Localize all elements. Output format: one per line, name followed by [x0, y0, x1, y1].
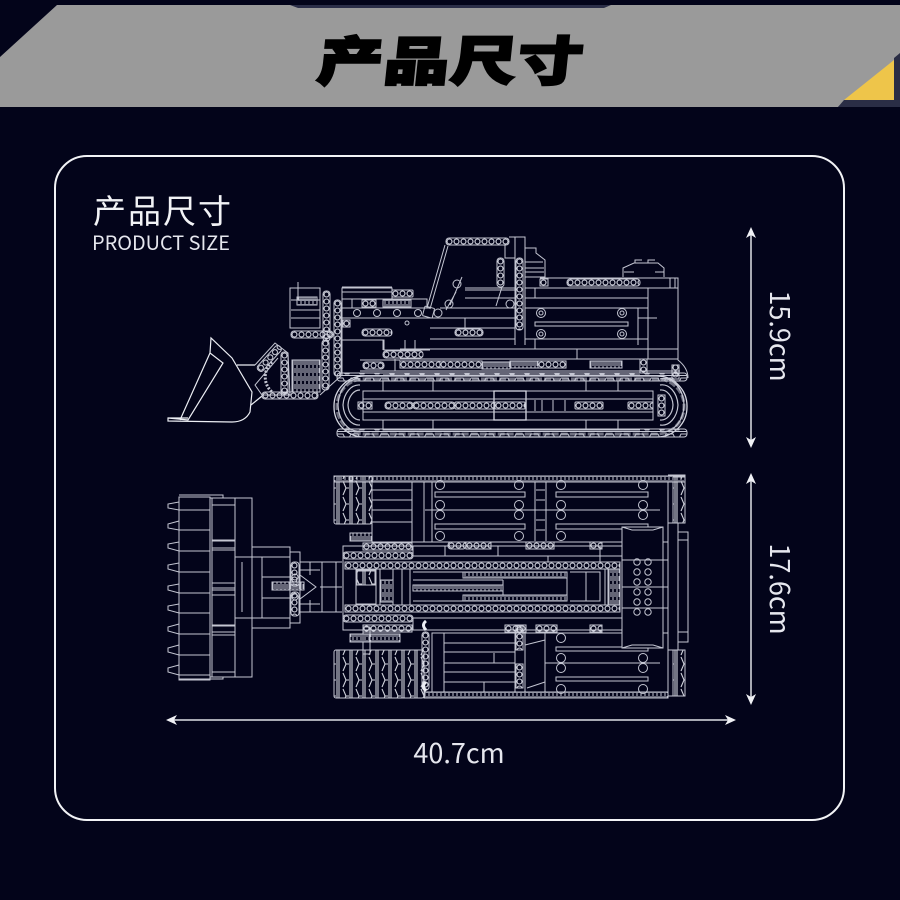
- upper track and deck: [334, 475, 685, 695]
- label: height 15.9cm: 15.9cm: [762, 290, 801, 382]
- panel heading Chinese: 产品尺寸: [93, 193, 231, 230]
- loader arm linkage: [255, 300, 342, 399]
- arrow: overall length: [166, 715, 736, 725]
- track assembly: [334, 373, 687, 437]
- upper roller row: [360, 351, 680, 379]
- side view drawing: [168, 237, 688, 437]
- bulldozer blade: [179, 495, 252, 680]
- cab and roof: [422, 237, 525, 345]
- arrow: top view width: [746, 473, 756, 705]
- label: width 17.6cm: 17.6cm: [762, 543, 801, 635]
- corner accent dark: [838, 53, 900, 107]
- deck bolts upper: [436, 480, 648, 540]
- blade teeth: [168, 502, 210, 675]
- header banner: [0, 5, 900, 107]
- banner title: 产品尺寸: [314, 20, 587, 95]
- loader bucket: [168, 338, 262, 422]
- chassis frame: [343, 542, 622, 632]
- rear hood: [622, 527, 688, 648]
- corner accent yellow: [844, 60, 894, 100]
- label: length 40.7cm: 40.7cm: [413, 732, 505, 771]
- banner grey shape: [0, 5, 900, 107]
- rear body: [400, 278, 688, 378]
- top centre notch: [290, 5, 611, 8]
- engine hump and exhaust: [525, 248, 664, 277]
- centre link: [291, 562, 342, 616]
- lower track and deck: [334, 621, 685, 698]
- top view drawing: [168, 475, 688, 698]
- panel heading English: PRODUCT SIZE: [92, 227, 230, 256]
- blade mount: [235, 547, 304, 628]
- front frame: [290, 282, 430, 390]
- panel: product size: [55, 156, 844, 820]
- arrow: side view height: [746, 227, 756, 448]
